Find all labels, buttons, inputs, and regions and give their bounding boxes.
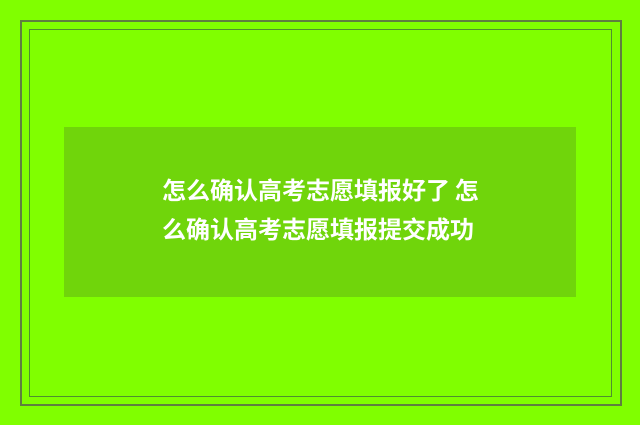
title line 2: 么确认高考志愿填报提交成功 [162, 217, 474, 244]
inner frame [29, 29, 612, 397]
title line 1: 怎么确认高考志愿填报好了 怎 [162, 178, 479, 205]
title panel [64, 127, 576, 297]
